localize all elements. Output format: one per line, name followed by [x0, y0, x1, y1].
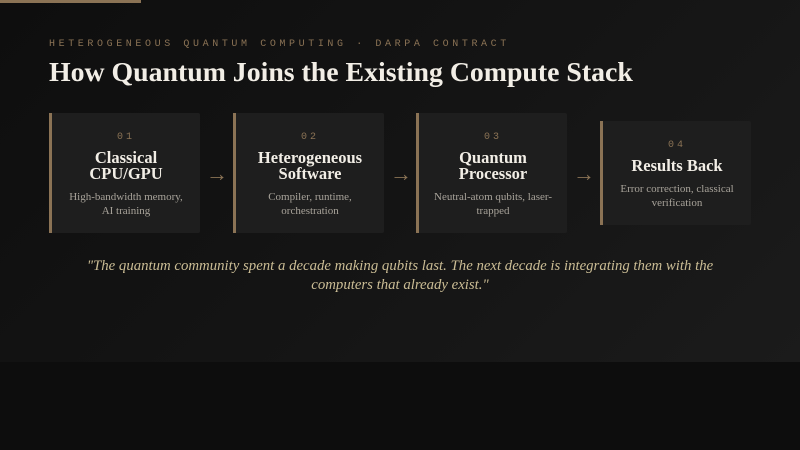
- arrow 3: →: [573, 161, 595, 186]
- card 1: High-bandwidth memory,: [69, 191, 183, 203]
- card 2: [233, 113, 384, 233]
- card 4: 04: [668, 140, 686, 151]
- card 2: 02: [301, 132, 319, 143]
- card 3: 03: [484, 132, 502, 143]
- card 1: AI training: [102, 205, 150, 217]
- card 1: Classical: [95, 148, 157, 167]
- arrow 1: →: [206, 161, 228, 186]
- quote: [87, 258, 713, 293]
- card 4: Error correction, classical: [620, 183, 734, 195]
- card 3: trapped: [476, 205, 509, 217]
- arrow 2: →: [390, 161, 412, 186]
- quote: "The quantum community spent a decade making qubits last. The next decade is integrating them with the: [87, 258, 713, 274]
- kicker: HETEROGENEOUS QUANTUM COMPUTING · DARPA CONTRACT: [49, 39, 510, 50]
- card 3: Processor: [459, 164, 527, 183]
- card 3: Neutral-atom qubits, laser-: [434, 191, 552, 203]
- card 4: verification: [652, 197, 702, 209]
- card 1: [49, 113, 200, 233]
- card 2: orchestration: [281, 205, 339, 217]
- card 3: [416, 113, 567, 233]
- card 2: Software: [279, 164, 341, 183]
- card 1: CPU/GPU: [89, 164, 163, 183]
- card 4: [600, 121, 751, 225]
- card 4: Results Back: [631, 156, 723, 175]
- card 2: Compiler, runtime,: [268, 191, 352, 203]
- quote: computers that already exist.": [311, 277, 489, 293]
- title: How Quantum Joins the Existing Compute Stack: [49, 57, 633, 88]
- card 2: Heterogeneous: [258, 148, 362, 167]
- card 1: 01: [117, 132, 135, 143]
- card 3: Quantum: [459, 148, 527, 167]
